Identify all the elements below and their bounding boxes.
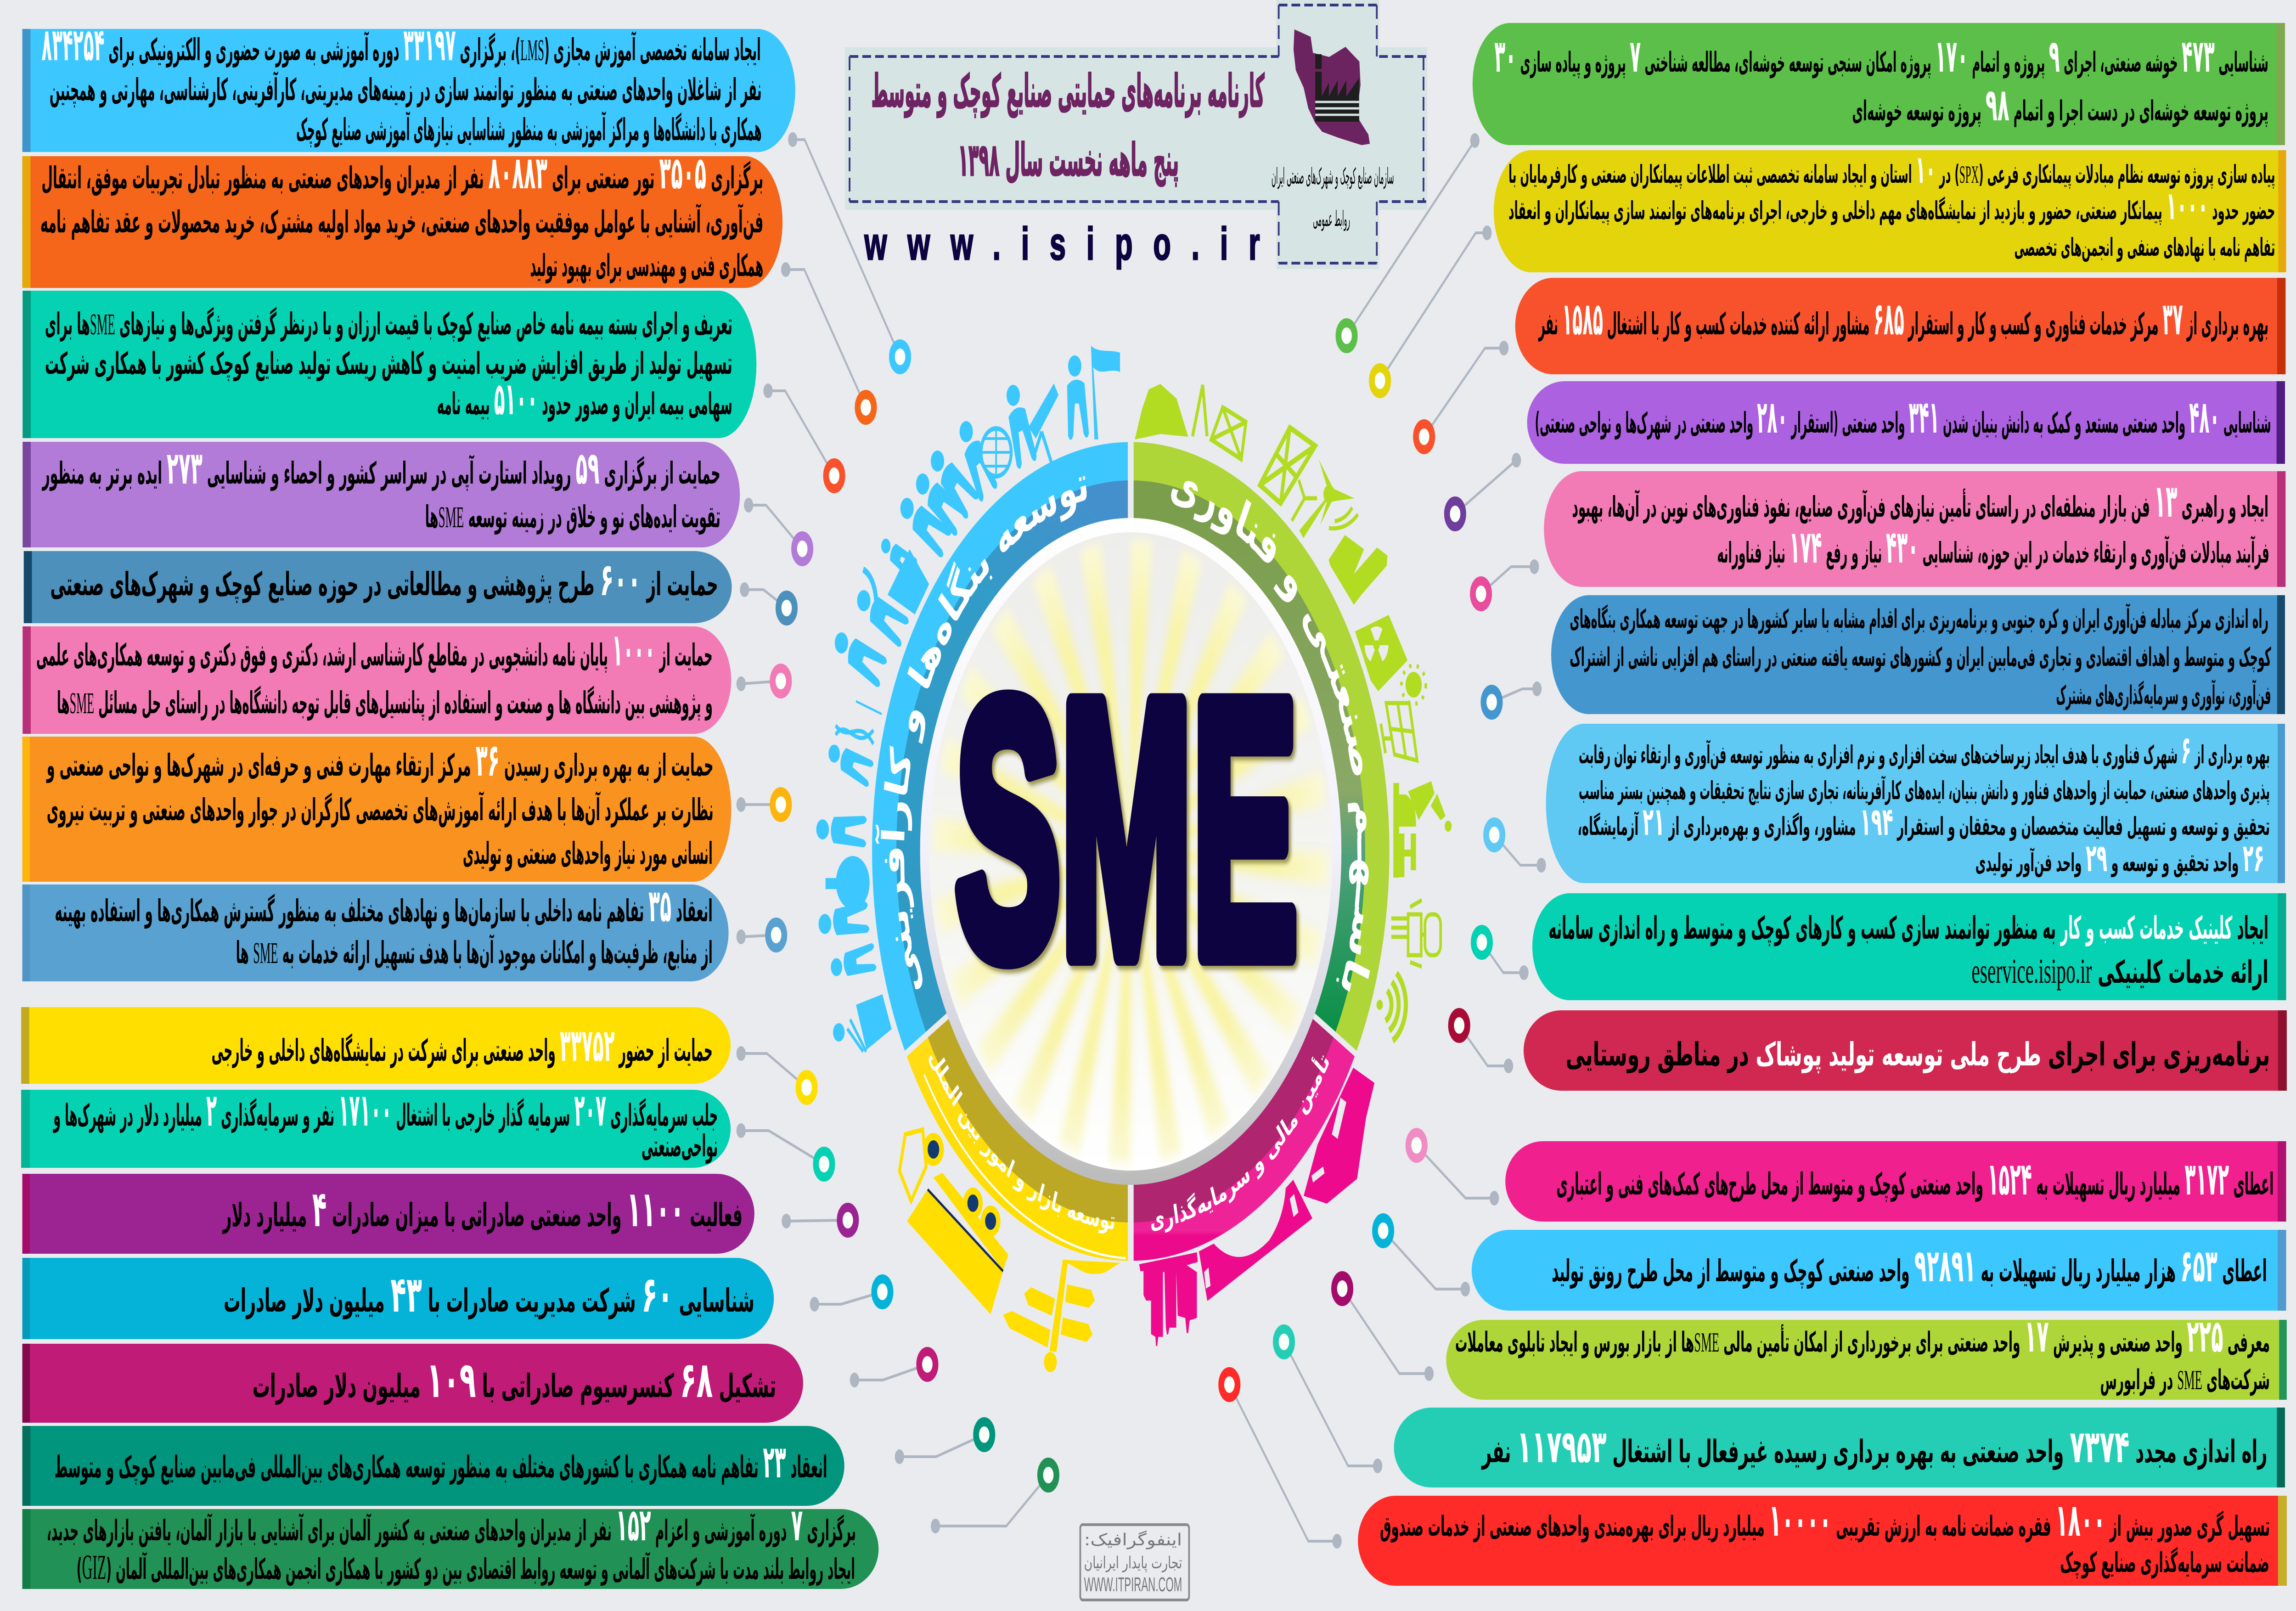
panel text: راه اندازی مجدد ۷۳۷۴ واحد صنعتی به بهره برداری رسیده غیرفعال با اشتغال ۱۱۷۹۵۳ نفر [1481,1421,2267,1473]
icon: machine and rocket [1393,781,1452,878]
panel shape [23,1174,754,1254]
panel: left 8 memoranda [23,880,729,981]
panel shape [23,626,731,734]
panel: right 10 facilities [1505,1141,2286,1222]
connector: left 2 [781,262,874,420]
panel shape [23,29,795,152]
connector: left 6 [737,668,789,694]
panel text: انعقاد ۲۳ تفاهم نامه همکاری با کشورهای مختلف به منظور توسعه همکاری‌های بین‌المللی فی‌مابین صنایع کوچک و متوسط [55,1436,827,1488]
panel text: حمایت از به بهره برداری رسیدن ۳۶ مرکز ارتقاء مهارت فنی و حرفه‌ای در شهرک‌ها و نواحی صنعتی و [46,734,714,787]
icon: radiation sign [1355,615,1407,691]
panel text [47,1499,856,1587]
connector: right 9 [1451,1013,1513,1073]
panel text: نفر از شاغلان واحدهای صنعتی به منظور توانمند سازی در زمینه‌های مدیریتی، کارآفرینی، کارشناسی، مهارتی و همچنین [50,71,762,108]
panel shape [21,1090,731,1168]
panel text: انسانی مورد نیاز واحدهای صنعتی و تولیدی [463,836,713,872]
panel text [1570,603,2271,710]
icon: factory rig [1328,535,1388,605]
connector: left 5 [740,582,795,621]
icon: lattice tower [1260,428,1315,503]
panel text: و پژوهشی بین دانشگاه ها و صنعت و استفاده از پتانسیل‌های قابل توجه دانشگاه‌ها در راستای حل مسائل SMEها [57,685,713,721]
ring sections [884,462,1377,1241]
panel text: جلب سرمایه‌گذاری ۲۰۷ سرمایه گذار خارجی با اشتغال ۱۷۱۰۰ نفر و سرمایه‌گذاری ۲ میلیارد دلار در شهرک‌ها و [53,1084,718,1137]
panel shape [1358,1496,2287,1586]
panel: right 9 clothing production [1524,1010,2287,1091]
panel text: تشکیل ۶۸ کنسرسیوم صادراتی با ۱۰۹ میلیون دلار صادرات [253,1352,776,1409]
panel text: ایجاد روابط بلند مدت با شرکت‌های آلمانی و توسعه روابط اقتصادی بین دو کشور با همکاری انجمن همکاری‌های بین‌المللی آلمان (GIZ) [77,1548,855,1587]
connector: right 5 [1473,559,1539,607]
ring text: industry and technology: باسـهـم صنعتـی و فناوری [1167,451,1387,1007]
panel shape [1446,1320,2287,1400]
panel: left 4 startup events [23,442,740,547]
panel: left 3 insurance [23,291,756,438]
panel text: اعطای ۶۵۳ هزار میلیارد ریال تسهیلات به ۹۲۸۹۱ واحد صنعتی کوچک و متوسط از محل طرح رونق تولید [1552,1240,2267,1292]
panel: left 11 exporters [23,1174,754,1254]
dashed border [850,5,1427,263]
header: title plate and logo: سازمان صنایع کوچک و شهرک‌های صنعتی ایران [1272,164,1394,189]
panel: left 12 export management [23,1258,774,1339]
panel shape [1546,724,2285,883]
icon: robot [1391,900,1441,967]
connector: right 13 [1276,1329,1382,1473]
panel text: انعقاد ۳۵ تفاهم نامه داخلی با سازمان‌ها و نهادهای مختلف به منظور گسترش همکاری‌ها و استفاده بهینه [55,880,713,932]
panel shape [23,884,729,981]
panel shape [23,1426,844,1506]
panel text [1508,147,2275,262]
panel text: حمایت از حضور ۳۳۷۵۲ واحد صنعتی برای شرکت در نمایشگاه‌های داخلی و خارجی [212,1020,713,1072]
panel shape [23,442,740,547]
inner ring [925,525,1337,1177]
connector: right 4 [1447,453,1521,527]
credit line 1: اینفوگرافیک: [1084,1531,1182,1550]
connector: left 11 [782,1207,856,1233]
panel shape [1551,595,2285,714]
icon: sun [1401,665,1426,704]
panel text: ایجاد کلینیک خدمات کسب و کار به منظور توانمند سازی کسب و کارهای کوچک و متوسط و راه اندازی سامانه [1548,910,2268,946]
panel text [36,624,713,721]
panel text: نظارت بر عملکرد آن‌ها با هدف ارائه آموزش‌های تخصصی کارگران در جوار واحدهای صنعتی و تربیت نیروی [47,791,714,828]
ring text: market development: توسعه بازار و امور بین الملل [926,1042,1116,1235]
connector: left 3 [763,383,842,489]
title line 1: کارنامه برنامه‌های حمایتی صنایع کوچک و متوسط [872,65,1265,118]
panel text [53,1084,718,1164]
panel: right 12 stock market [1446,1310,2287,1400]
central circle [875,436,1387,1267]
panel: right 6 Korea exchange [1551,595,2285,714]
header: title plate and logo [845,0,1427,269]
panel text: اعطای ۳۱۷۲ میلیارد ریال تسهیلات به ۱۵۲۴ واحد صنعتی کوچک و متوسط از محل طرح‌های کمک‌های فنی و اعتباری [1556,1153,2273,1205]
panel: right 13 restarted units [1394,1408,2285,1487]
panel text: ارائه خدمات کلینیکی eservice.isipo.ir [1972,952,2268,991]
panel text: از منابع، ظرفیت‌ها و امکانات موجود آن‌ها با هدف تسهیل ارائه خدمات به SME ها [236,934,713,971]
connector: left 10 [737,1123,832,1177]
panel text [55,880,713,971]
panel text: تسهیل تولید از طریق افزایش ضریب امنیت و کاهش ریسک تولید صنایع کوچک کشور با همکاری شرکت [45,346,732,382]
panel: left 2 industrial tours [23,147,782,288]
connector: right 8 [1474,929,1529,980]
panel text: برگزاری ۳۵۰۵ تور صنعتی برای ۸۰۸۸۳ نفر از مدیران واحدهای صنعتی به منظور تبادل تجربیات موفق، انتقال [41,147,763,199]
panel shape [23,156,782,288]
panel text [40,147,763,284]
panel text [1572,475,2269,574]
title line 2: پنج ماهه نخست سال ۱۳۹۸ [958,134,1179,186]
panel shape [23,291,756,438]
panel text: شرکت‌های SME در فرابورس [2100,1363,2270,1397]
panel text: برگزاری ۷ دوره آموزشی و اعزام ۱۵۲ نفر از مدیران واحدهای صنعتی به کشور آلمان برای آشنایی با بازار آلمان، یافتن بازارهای جدید، [47,1499,856,1551]
panel text: حمایت از ۱۰۰۰ پایان نامه دانشجویی در مقاطع کارشناسی ارشد، دکتری و فوق دکتری و توسعه همکاری‌های علمی [36,624,713,676]
panel text [1455,1310,2270,1397]
panel shape [1544,471,2285,587]
icon: wifi [1377,973,1406,1041]
panel: left 15 Germany training [23,1499,878,1589]
icon: worker statue [1135,384,1188,439]
panel: right 1 clusters [1473,23,2285,145]
panel text [46,734,714,872]
connector: left 4 [744,498,810,562]
panel text: همکاری با دانشگاه‌ها و مراکز آموزشی به منظور شناسایی نیازهای آموزشی صنایع کوچک [296,111,762,148]
panel text [41,19,762,148]
panel text [1548,910,2268,991]
logo: Iran map with factory [1294,29,1370,145]
panel: right 11 production boom [1472,1230,2286,1311]
connector: right 3 [1416,341,1508,450]
panel: right 4 knowledge based [1527,381,2285,464]
panel text: برنامه‌ریزی برای اجرای طرح ملی توسعه تولید پوشاک در مناطق روستایی [1566,1036,2270,1074]
panel text: حمایت از برگزاری ۵۹ رویداد استارت آپی در سراسر کشور و احصاء و شناسایی ۲۷۳ ایده برتر به منظور [42,442,720,495]
panel shape [21,1007,731,1084]
ring text: finance and investment: تأمین مالی و سرمایه‌گذاری [1149,1048,1334,1236]
credit line 2: تجارت پایدار ایرانیان [1084,1554,1182,1573]
panel shape [1472,1230,2286,1311]
connector: right 10 [1408,1132,1499,1205]
panel text: معرفی ۲۲۵ واحد صنعتی و پذیرش ۱۷ واحد صنعتی برای برخورداری از امکان تأمین مالی SMEها از بازار بورس و ایجاد تابلوی معاملات [1455,1310,2270,1363]
panel: left 6 theses [23,624,731,734]
credit line 3: WWW.ITPIRAN.COM [1084,1573,1182,1596]
inner disc [929,532,1333,1171]
panel shape [23,737,731,882]
panel text: شناسایی ۴۷۳ خوشه صنعتی، اجرای ۹ پروژه و اتمام ۱۷۰ پروژه امکان سنجی توسعه خوشه‌ای، مطالعه شناختی ۷ پروژه و پیاده سازی ۳۰ [1494,30,2268,83]
panel: right 14 guarantees [1358,1494,2287,1586]
connector: left 1 [788,132,908,370]
connector: right 1 [1339,133,1480,349]
panel shape [23,1344,803,1423]
panel: right 2 subcontracting [1494,147,2286,272]
panel shape [23,1258,774,1339]
icons: yellow transport and signpost [900,1130,1120,1372]
panel text: نواحی‌صنعتی [642,1129,718,1164]
panel shape [24,551,732,623]
panel shape [1532,893,2286,1000]
icons: green industry and technology [1135,384,1452,1041]
connector: right 7 [1486,822,1546,873]
panel text: تقویت ایده‌های نو و خلاق در زمینه توسعه SMEها [425,500,720,535]
panel text: همکاری فنی و مهندسی برای بهبود تولید [530,248,763,284]
icon: wind turbines [1292,459,1358,538]
panel text: تعریف و اجرای بسته بیمه نامه خاص صنایع کوچک با قیمت ارزان و با درنظر گرفتن ویژگی‌ها و نیازهای SMEها برای [45,306,732,342]
credit box [1080,1525,1189,1600]
panel: left 1 training [23,19,795,152]
ring text: business development: توسعه بنگاه‌ها و کارآفرینی [875,454,1092,1005]
panel: left 14 international memoranda [23,1426,844,1506]
plate background [845,0,1427,269]
panel: right 3 service centres [1515,278,2285,374]
panel text: ۲۶ واحد تحقیق و توسعه و ۲۹ واحد فن‌آور تولیدی [1975,835,2264,880]
panel: left 9 exhibitions [21,1007,731,1084]
connector: right 14 [1221,1372,1342,1549]
connector: left 9 [737,1046,815,1100]
panel text: فن‌آوری، آشنایی با عوامل موفقیت واحدهای صنعتی، خرید مواد اولیه مشترک، خرید محصولات و عقد تفاهم نامه [40,203,763,240]
panel text: فعالیت ۱۱۰۰ واحد صنعتی صادراتی با میزان صادرات ۴ میلیارد دلار [222,1181,743,1238]
panel: left 5 research [24,551,732,623]
SME heading: SME [955,626,1298,1032]
panel text: حمایت از ۶۰۰ طرح پژوهشی و مطالعاتی در حوزه صنایع کوچک و شهرک‌های صنعتی [50,554,718,606]
panel text: سهامی بیمه ایران و صدور حدود ۵۱۰۰ بیمه نامه [437,373,732,425]
icon: signpost [1003,1260,1120,1372]
icon: oil pump [1193,385,1246,459]
icon: truck [900,1130,1008,1314]
connector: right 11 [1375,1218,1470,1296]
connector: left 15 [931,1462,1057,1533]
panel shape [1473,23,2285,145]
panel text: شناسایی ۶۰ شرکت مدیریت صادرات با ۴۳ میلیون دلار صادرات [224,1266,754,1324]
panel: left 7 skills centres [23,734,731,882]
panel text [1380,1494,2270,1579]
panel shape [1524,1010,2287,1091]
panel text [1577,727,2270,880]
connector: left 12 [810,1279,890,1312]
connector: right 12 [1334,1276,1434,1381]
panel shape [23,1509,878,1589]
panel: left 13 consortia [23,1344,803,1423]
panel shape [1394,1408,2285,1487]
panel: right 5 tech market [1544,471,2285,587]
connector: left 13 [850,1352,935,1387]
panel: right 7 technology towns [1546,724,2285,883]
icon: solar panel [1381,703,1417,760]
panel shape [1505,1141,2286,1222]
panel shape [1515,278,2285,374]
section gaps [901,436,1360,1267]
connector: left 8 [737,922,784,948]
panel: right 8 business clinic [1532,893,2286,1000]
connector: right 2 [1372,225,1491,394]
panel text [42,442,720,535]
connector: left 7 [737,792,789,817]
connector: right 6 [1484,682,1542,715]
panel text: ایجاد سامانه تخصصی آموزش مجازی (LMS)، برگزاری ۳۳۱۹۷ دوره آموزشی به صورت حضوری و الکترونیکی برای ۸۳۴۲۵۴ [41,19,761,71]
panel text [45,306,732,425]
sun rays [1032,695,1229,1008]
header: title plate and logo: روابط عمومی [1313,207,1350,231]
connector: left 14 [895,1422,992,1464]
panel shape [1494,150,2286,272]
icons: blue people and science [816,346,1120,1052]
panel: left 10 foreign investment [21,1084,731,1168]
icons: pink buildings [1139,1068,1374,1346]
panel shape [1527,381,2285,464]
panel text [1494,30,2268,131]
website url: www.isipo.ir [864,218,1260,270]
